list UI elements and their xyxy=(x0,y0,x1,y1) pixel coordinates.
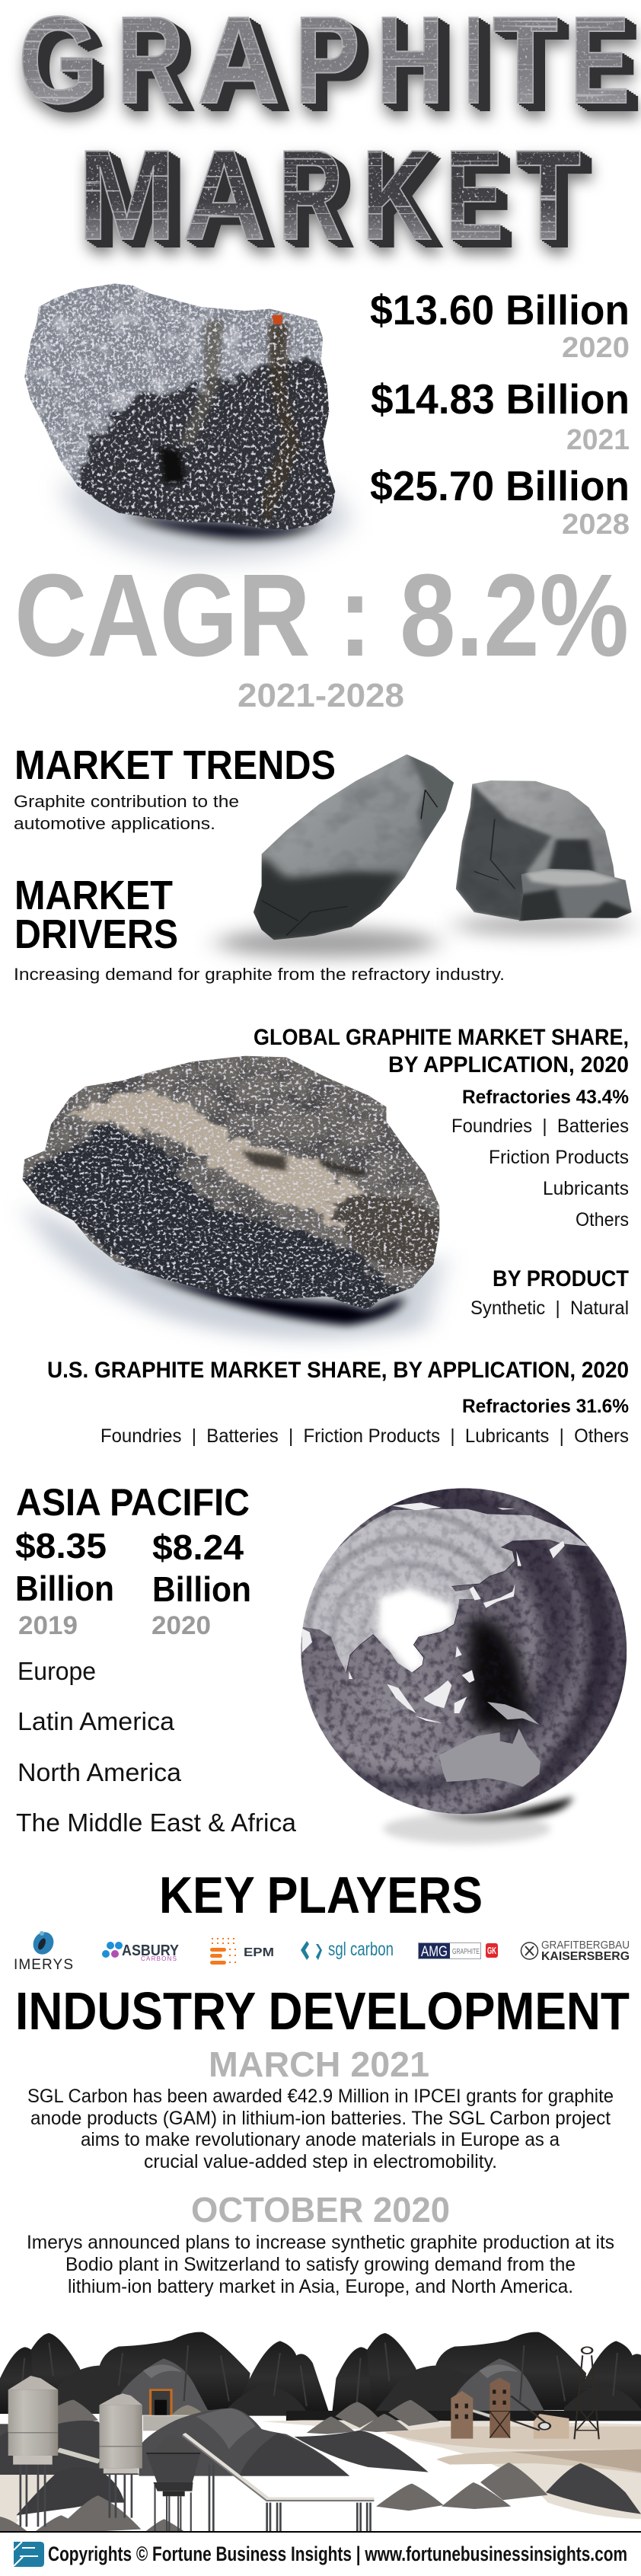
title: Graphite Market xyxy=(18,0,630,267)
logo: AMG Graphite GK xyxy=(419,1943,498,1960)
text: market drivers body: Increasing demand for graphite from the refractory industry. xyxy=(14,965,505,984)
title line: MARKET: A xyxy=(183,123,266,267)
value 2019: $8.35 xyxy=(15,1526,107,1566)
panel: regions xyxy=(15,1481,297,1837)
text: SGL Carbon development: aims to make revolutionary anode materials in Europe as a xyxy=(81,2129,560,2150)
background hills xyxy=(0,2332,641,2421)
year: 2021 xyxy=(566,424,630,456)
heading: BY APPLICATION, 2020 xyxy=(388,1052,629,1077)
value 2020: Billion xyxy=(152,1569,251,1609)
logo: Fortune Business Insights xyxy=(14,2542,44,2567)
illustration: graphite rocks xyxy=(217,752,633,957)
text: SGL Carbon development: crucial value-added step in electromobility. xyxy=(144,2151,497,2172)
panel: by product xyxy=(470,1266,629,1319)
title line: MARKET: K xyxy=(362,123,432,267)
region list: Europe xyxy=(18,1657,96,1685)
logo: SGL Carbon: sgl carbon xyxy=(328,1939,394,1960)
stat: 2021 market size xyxy=(371,375,630,456)
connector conveyor xyxy=(58,2450,99,2462)
image: graphite globe xyxy=(301,1488,627,1847)
segment list: Foundries | Batteries xyxy=(451,1116,629,1137)
image: graphite rock 2 xyxy=(16,1052,445,1339)
heading: key players: KEY PLAYERS xyxy=(159,1866,483,1924)
logo: EPM: EPM xyxy=(244,1946,274,1959)
stat: 2028 market size xyxy=(370,462,630,541)
main conveyor xyxy=(184,2434,374,2500)
region list: The Middle East & Africa xyxy=(16,1808,297,1837)
year: 2028 xyxy=(562,509,630,541)
footer xyxy=(14,2542,627,2567)
silo 1 xyxy=(8,2376,58,2465)
logo: Imerys xyxy=(14,1929,73,1973)
logo: AMG Graphite GK: AMG xyxy=(421,1944,448,1960)
segment list: Lubricants xyxy=(543,1178,629,1199)
land: Australia xyxy=(439,1729,541,1787)
image: graphite rock 1 xyxy=(21,279,352,560)
mine entrance xyxy=(149,2389,206,2415)
land: Asia xyxy=(303,1509,588,1672)
logo: Grafitbergbau Kaisersberg: GRAFITBERGBAU xyxy=(541,1939,630,1952)
logo: EPM xyxy=(210,1939,274,1965)
value: $13.60 Billion xyxy=(370,286,630,334)
gravel piles lower xyxy=(0,2463,641,2532)
buildings xyxy=(451,2347,599,2439)
text: market trends body: Graphite contribution to the xyxy=(14,792,239,811)
year 2020: 2020 xyxy=(151,1611,211,1640)
logos row xyxy=(14,1929,630,1973)
divider line xyxy=(0,2531,641,2533)
heading: market drivers: DRIVERS xyxy=(14,911,178,957)
heading: market drivers: MARKET xyxy=(14,873,173,918)
title line: MARKET: R xyxy=(278,123,343,267)
date: October 2020: OCTOBER 2020 xyxy=(191,2190,450,2230)
value 2020: $8.24 xyxy=(152,1527,244,1567)
stat: 2020 market size xyxy=(370,286,630,364)
region list: Latin America xyxy=(18,1707,175,1735)
panel: U.S. market share xyxy=(47,1358,629,1447)
hopper xyxy=(146,2434,200,2496)
product types: Synthetic | Natural xyxy=(470,1298,629,1319)
year 2019: 2019 xyxy=(18,1611,78,1640)
segment list: Friction Products xyxy=(489,1147,629,1168)
illustration: mining scene xyxy=(0,2332,641,2532)
logo: Asbury Carbons: CARBONS xyxy=(141,1955,177,1962)
logo: SGL Carbon xyxy=(301,1939,394,1960)
logo: AMG Graphite GK: GK xyxy=(487,1945,496,1956)
logo: Imerys: IMERYS xyxy=(14,1957,73,1973)
left rock xyxy=(250,752,458,944)
value: $14.83 Billion xyxy=(371,375,630,423)
leading share: Refractories 31.6% xyxy=(462,1396,629,1417)
text: Imerys development: Imerys announced plans to increase synthetic graphite production at its xyxy=(27,2232,614,2253)
title line: MARKET: T xyxy=(515,123,581,267)
silo 2 xyxy=(99,2393,142,2473)
title line: MARKET: M xyxy=(78,123,176,267)
text: market trends body: automotive applications. xyxy=(14,814,215,833)
segment list: Others xyxy=(576,1209,629,1231)
logo: Grafitbergbau Kaisersberg xyxy=(521,1939,630,1963)
date: March 2021: MARCH 2021 xyxy=(209,2045,429,2084)
title line: MARKET: E xyxy=(445,123,503,267)
logo: AMG Graphite GK: GRAPHITE xyxy=(452,1948,480,1956)
year: 2020 xyxy=(562,332,630,364)
silo legs xyxy=(21,2465,371,2532)
logo: Asbury Carbons xyxy=(102,1942,180,1962)
panel: global market share xyxy=(254,1025,629,1231)
right rock xyxy=(454,780,621,922)
segment list: Foundries | Batteries | Friction Products | Lubricants | Others xyxy=(100,1425,629,1447)
logo: Grafitbergbau Kaisersberg: KAISERSBERG xyxy=(541,1950,630,1963)
heading: market trends: MARKET TRENDS xyxy=(14,742,336,788)
value: $25.70 Billion xyxy=(370,462,630,509)
text: SGL Carbon development: anode products (GAM) in lithium-ion batteries. The SGL Carbon project xyxy=(30,2108,611,2129)
leading share: Refractories 43.4% xyxy=(462,1087,629,1108)
text: Imerys development: Bodio plant in Switzerland to satisfy growing demand from the xyxy=(65,2254,576,2275)
coal piles xyxy=(0,2408,429,2515)
land: New Guinea xyxy=(487,1702,539,1725)
gravel piles upper xyxy=(57,2400,439,2434)
sand ground xyxy=(0,2415,641,2528)
heading: BY PRODUCT xyxy=(493,1266,629,1291)
value 2019: Billion xyxy=(15,1569,114,1608)
logo: Asbury Carbons: ASBURY xyxy=(122,1942,180,1959)
small rock xyxy=(519,868,632,921)
CAGR period: 2021-2028 xyxy=(238,677,404,714)
heading: Asia Pacific: ASIA PACIFIC xyxy=(16,1481,250,1524)
text: SGL Carbon development: SGL Carbon has been awarded €42.9 Million in IPCEI grants for graphite xyxy=(27,2086,614,2107)
islands xyxy=(302,1502,565,1723)
text: Imerys development: lithium-ion battery market in Asia, Europe, and North America. xyxy=(68,2276,573,2297)
region list: North America xyxy=(18,1758,182,1786)
